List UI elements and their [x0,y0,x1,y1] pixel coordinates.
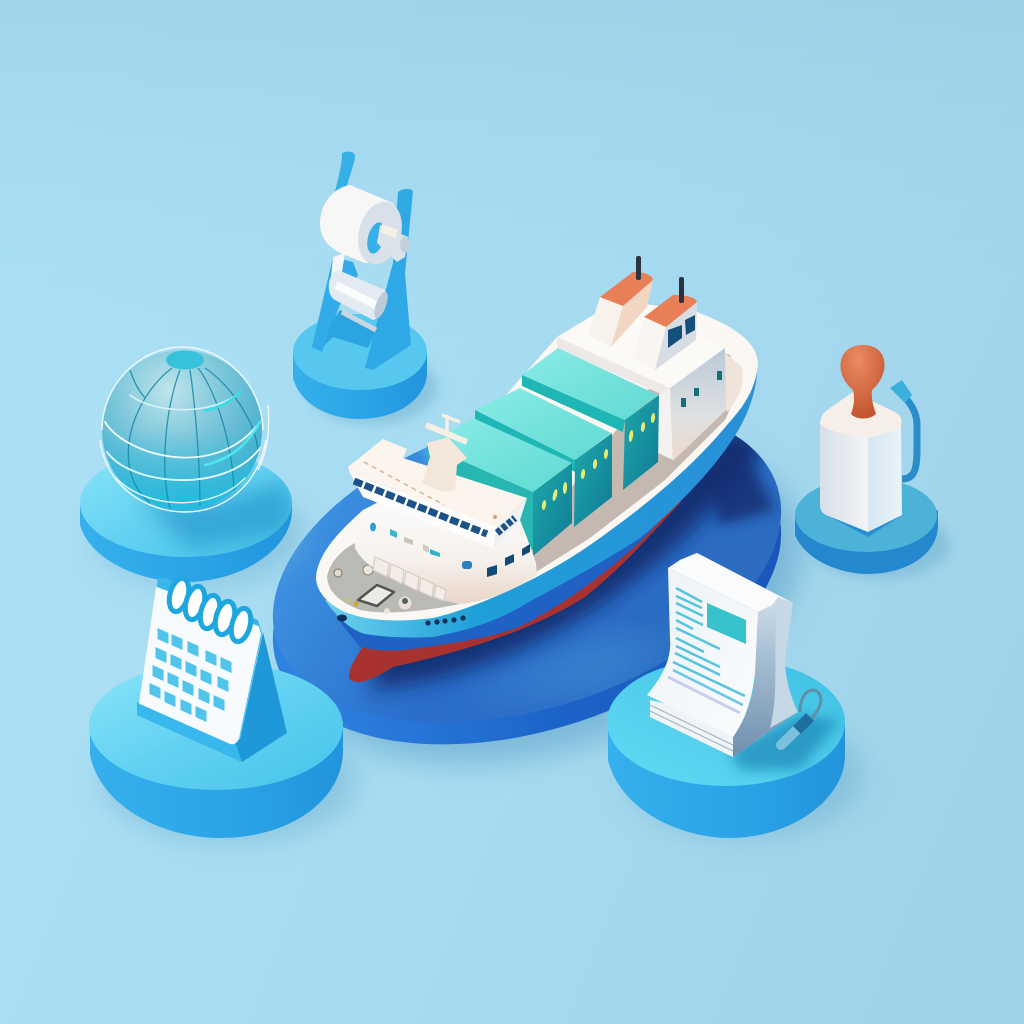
cargo container 1 [522,348,659,490]
ship hull red keel [349,470,700,682]
paper stack [650,553,798,757]
calendar page [140,588,260,743]
cargo container 3 [427,418,572,556]
ship hull dark band [340,410,745,650]
lower roller [329,270,390,330]
icon: calendar on podium [89,576,355,840]
top page [647,568,758,737]
icon: documents on podium [607,553,863,838]
icon: container ship [316,256,758,682]
ship deck rim [316,300,758,620]
illustration: container ship surrounded by logistics icons [80,0,1024,848]
paper roll [320,185,410,269]
podium [80,449,305,585]
ship hull blue band [325,360,757,638]
cargo container 2 [475,388,612,527]
pen [781,690,821,745]
icon: paper roll on podium [293,152,437,424]
calendar base [137,632,287,762]
icon: globe on podium [80,347,305,585]
podium [293,314,437,424]
deck fittings [334,565,412,614]
calendar binder rings [166,576,254,644]
hose [890,380,917,479]
podium [89,662,355,840]
stand frame [312,152,413,370]
document text lines [668,588,745,713]
mast [422,415,467,492]
globe sphere [100,347,269,512]
ship portholes [337,614,466,626]
panel: central blue platform [272,435,812,775]
funnel front [632,277,697,370]
document image block [707,603,746,644]
icon: fuel bottle with knob on podium [795,345,950,579]
ship side walkway [530,340,735,574]
funnel rear [588,256,653,347]
stern superstructure [557,296,726,461]
bottle body [820,392,902,537]
bridge wing deck [348,439,527,548]
ship stern inner deck [722,352,743,412]
calendar date grid [150,628,232,722]
podium [795,478,950,579]
knob [840,345,885,418]
ship foredeck [327,543,460,612]
podium [607,658,863,838]
bridge hull body [355,490,537,604]
